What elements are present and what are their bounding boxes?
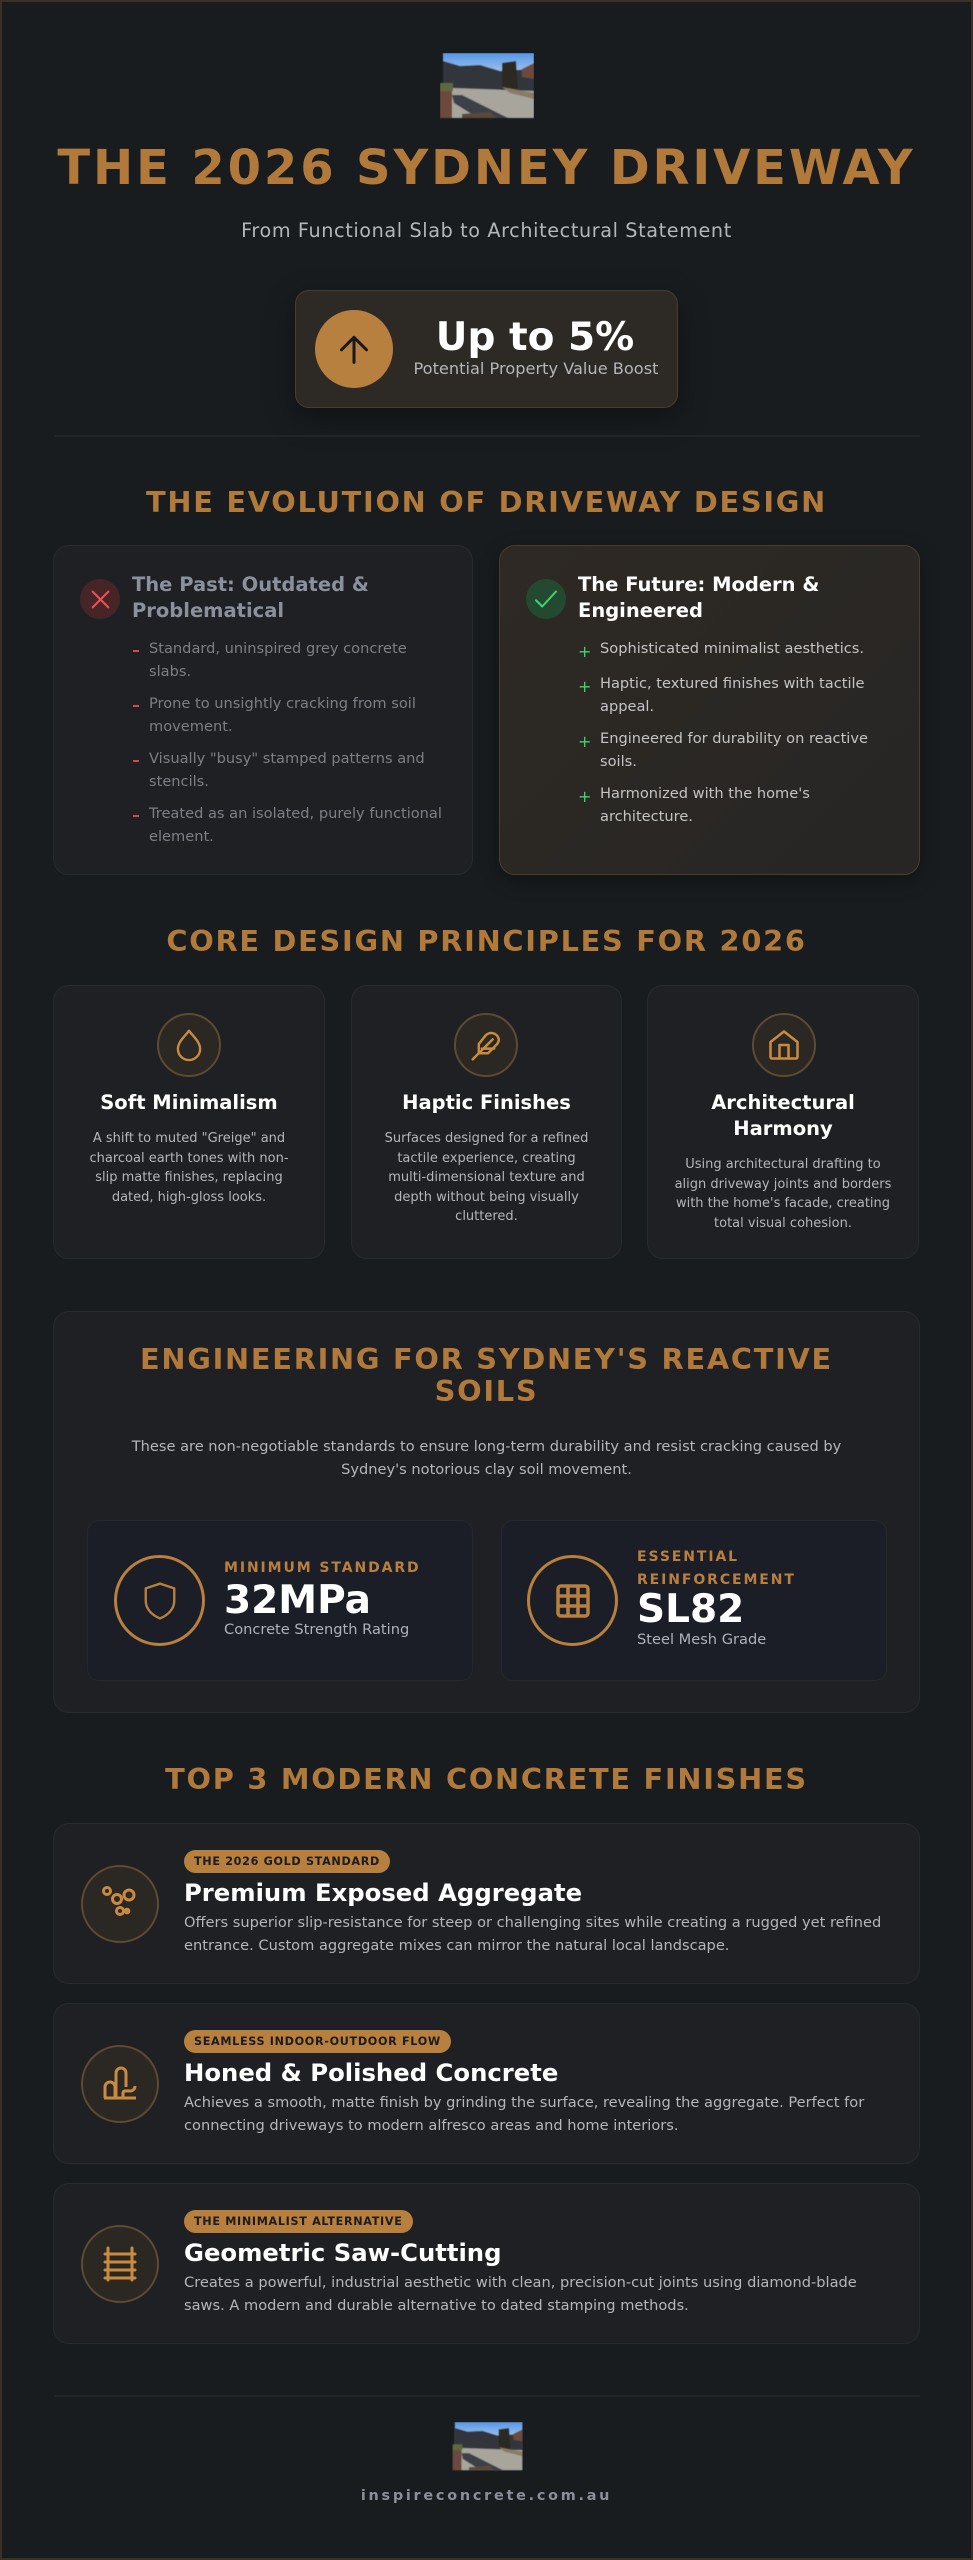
- heading: core principles: CORE DESIGN PRINCIPLES FOR 2026: [166, 924, 807, 958]
- panel: the future: Engineered for durability on reactive: [600, 730, 868, 747]
- panel: the past: Treated as an isolated, purely functional: [149, 805, 442, 822]
- stat caption: Concrete Strength Rating: [224, 1621, 409, 1638]
- stat label: MINIMUM STANDARD: [224, 1560, 421, 1576]
- finish text: [184, 2094, 864, 2134]
- engineering intro: These are non-negotiable standards to ensure long-term durability and resist cracking caused by: [132, 1438, 841, 1455]
- heading: finishes: TOP 3 MODERN CONCRETE FINISHES: [165, 1762, 808, 1796]
- heading: engineering: SOILS: [435, 1374, 538, 1408]
- card text: [89, 1131, 289, 1204]
- engineering intro: Sydney's notorious clay soil movement.: [341, 1461, 632, 1478]
- icon: check: [526, 579, 566, 619]
- panel: the future: architecture.: [600, 808, 693, 825]
- footer photo: driveway: [452, 2422, 523, 2471]
- icon: cross: [80, 579, 120, 619]
- card text: tactile experience, creating: [397, 1150, 576, 1166]
- icon: saw cut ladder: [81, 2225, 159, 2303]
- panel: the future: [499, 545, 920, 875]
- panel: the past: [53, 545, 473, 875]
- subtitle: From Functional Slab to Architectural Statement: [241, 219, 732, 242]
- finish text: entrance. Custom aggregate mixes can mirror the natural local landscape.: [184, 1937, 729, 1954]
- boost caption: Potential Property Value Boost: [414, 359, 658, 378]
- card title: Harmony: [733, 1117, 833, 1140]
- icon: honed surface: [81, 2045, 159, 2123]
- panel: exposed aggregate: [53, 1823, 920, 1984]
- card text: Surfaces designed for a refined: [385, 1131, 588, 1146]
- card text: multi-dimensional texture and: [388, 1170, 585, 1185]
- icon: house: [752, 1013, 816, 1077]
- icon: mesh grid: [527, 1555, 618, 1646]
- card text: slip matte finishes, replacing: [95, 1170, 283, 1185]
- card: soft minimalism: [53, 985, 325, 1259]
- card title: [711, 1091, 855, 1140]
- panel: saw-cutting: [53, 2183, 920, 2344]
- panel: the future: Harmonized with the home's: [600, 785, 810, 802]
- heading: engineering: ENGINEERING FOR SYDNEY'S REACTIVE: [140, 1342, 833, 1376]
- panel: the past: element.: [149, 828, 214, 845]
- panel: the future: Haptic, textured finishes with tactile: [600, 675, 865, 692]
- callout: property value boost: [295, 290, 678, 408]
- finish title: Honed & Polished Concrete: [184, 2058, 558, 2087]
- panel: the past: movement.: [149, 718, 233, 735]
- panel: the future: appeal.: [600, 698, 654, 715]
- engineering intro: [132, 1438, 841, 1478]
- panel: the past: Prone to unsightly cracking from soil: [149, 695, 416, 712]
- past title: Problematical: [132, 599, 284, 622]
- stat label: [637, 1549, 796, 1588]
- icon: shield: [114, 1555, 205, 1646]
- future title: The Future: Modern &: [578, 573, 819, 596]
- card text: depth without being visually: [394, 1190, 579, 1204]
- card text: with the home's facade, creating: [676, 1196, 890, 1211]
- past list: slabs.: [149, 663, 191, 680]
- stat: 32MPa: [87, 1520, 473, 1681]
- past title: [132, 573, 369, 622]
- icon: aggregate: [81, 1865, 159, 1943]
- panel: the future: +: [578, 732, 591, 751]
- finish title: Premium Exposed Aggregate: [184, 1878, 582, 1907]
- header photo: driveway: [440, 53, 534, 119]
- stat value: 32MPa: [224, 1578, 371, 1623]
- finish text: Achieves a smooth, matte finish by grinding the surface, revealing the aggregate. Perfect for: [184, 2094, 864, 2111]
- stat label: ESSENTIAL: [637, 1549, 739, 1565]
- boost figure: Up to 5%: [436, 315, 634, 360]
- stat value: SL82: [637, 1587, 744, 1632]
- card: haptic finishes: [351, 985, 622, 1259]
- finish title: Geometric Saw-Cutting: [184, 2238, 502, 2267]
- heading: engineering: [140, 1342, 833, 1408]
- finish text: [184, 1914, 881, 1954]
- future list: Sophisticated minimalist aesthetics.: [600, 640, 864, 657]
- card text: Using architectural drafting to: [685, 1157, 881, 1172]
- future title: Engineered: [578, 599, 703, 622]
- stat label: REINFORCEMENT: [637, 1572, 796, 1588]
- stat: SL82: [501, 1520, 887, 1681]
- card text: dated, high-gloss looks.: [112, 1190, 266, 1204]
- card: architectural harmony: [647, 985, 919, 1259]
- tag: [184, 2030, 451, 2053]
- card text: [675, 1157, 891, 1230]
- icon: drop: [157, 1013, 221, 1077]
- finish text: connecting driveways to modern alfresco areas and home interiors.: [184, 2117, 678, 2134]
- card text: [385, 1131, 588, 1224]
- panel: the past: stencils.: [149, 773, 209, 790]
- tag: SEAMLESS INDOOR-OUTDOOR FLOW: [194, 2035, 441, 2048]
- future title: [578, 573, 819, 622]
- icon: feather: [454, 1013, 518, 1077]
- finish text: saws. A modern and durable alternative to dated stamping methods.: [184, 2297, 689, 2314]
- card text: cluttered.: [455, 1209, 518, 1224]
- panel: the future: +: [578, 642, 591, 661]
- card title: Soft Minimalism: [100, 1091, 278, 1114]
- card text: A shift to muted "Greige" and: [93, 1131, 285, 1146]
- tag: [184, 1850, 390, 1873]
- tag: [184, 2210, 413, 2233]
- panel: the future: +: [578, 677, 591, 696]
- panel: honed polished: [53, 2003, 920, 2164]
- icon: up arrow: [315, 310, 393, 388]
- finish text: Offers superior slip-resistance for steep or challenging sites while creating a rugged yet refined: [184, 1914, 881, 1931]
- panel: the past: Visually "busy" stamped patterns and: [149, 750, 425, 767]
- finish text: Creates a powerful, industrial aesthetic with clean, precision-cut joints using diamond-blade: [184, 2274, 857, 2291]
- stat caption: Steel Mesh Grade: [637, 1631, 766, 1648]
- tag: THE MINIMALIST ALTERNATIVE: [194, 2215, 403, 2228]
- panel: engineering: [53, 1311, 920, 1713]
- panel: the future: +: [578, 787, 591, 806]
- title: THE 2026 SYDNEY DRIVEWAY: [57, 140, 916, 196]
- card text: align driveway joints and borders: [675, 1176, 891, 1192]
- past list: Standard, uninspired grey concrete: [149, 640, 407, 657]
- card title: Haptic Finishes: [402, 1091, 571, 1114]
- past title: The Past: Outdated &: [132, 573, 369, 596]
- footer url: inspireconcrete.com.au: [361, 2488, 612, 2504]
- card text: total visual cohesion.: [714, 1216, 852, 1230]
- finish text: [184, 2274, 857, 2314]
- card text: charcoal earth tones with non-: [89, 1150, 289, 1166]
- tag: THE 2026 GOLD STANDARD: [194, 1855, 380, 1868]
- panel: the future: soils.: [600, 753, 637, 770]
- past list: [149, 640, 407, 680]
- heading: evolution: THE EVOLUTION OF DRIVEWAY DESIGN: [146, 485, 827, 519]
- card title: Architectural: [711, 1091, 855, 1114]
